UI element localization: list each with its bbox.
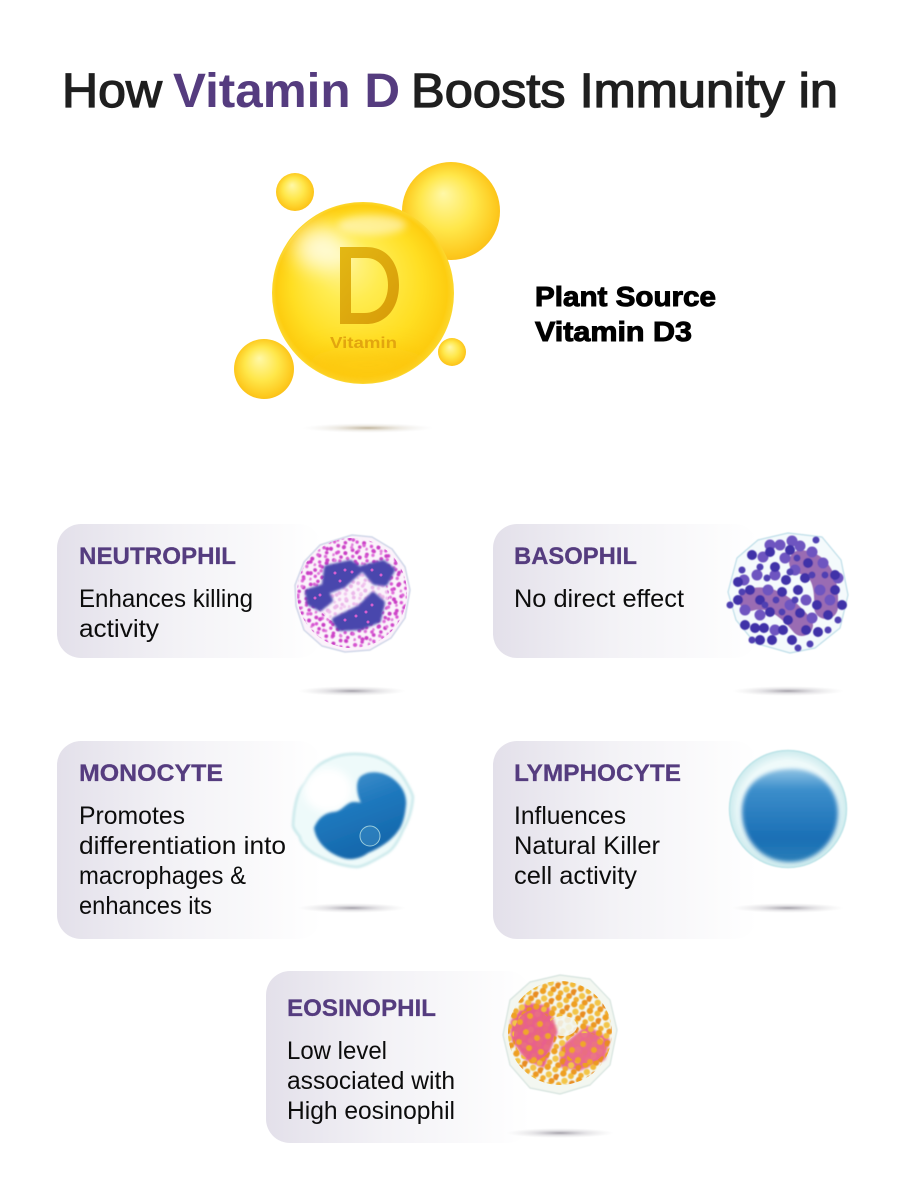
text: neutrophil effect [79, 585, 253, 643]
icon: neutrophil cell [290, 530, 415, 696]
heading: eosinophil: EOSINOPHIL [287, 995, 436, 1022]
icon: monocyte cell [293, 754, 413, 913]
icon: basophil cell [728, 533, 848, 696]
label: plant source vitamin D3: Plant Source [535, 281, 716, 312]
panel: basophil [493, 524, 848, 696]
text: monocyte effect: macrophages & [79, 862, 246, 890]
title: Vitamin D [173, 65, 400, 118]
panel: lymphocyte [493, 741, 846, 939]
text: eosinophil effect: High eosinophil [287, 1097, 455, 1125]
title [62, 65, 838, 118]
icon: vitamin D capsule bubbles: Vitamin [330, 335, 397, 352]
label: plant source vitamin D3: Vitamin D3 [535, 316, 692, 347]
text: monocyte effect: Promotes [79, 802, 185, 830]
text: lymphocyte effect: cell activity [514, 862, 637, 890]
text: lymphocyte effect [514, 802, 660, 890]
heading: monocyte: MONOCYTE [79, 760, 223, 787]
label: plant source vitamin D3 [535, 281, 716, 347]
title: Boosts Immunity in [411, 65, 838, 118]
panel: monocyte [57, 741, 413, 939]
heading: basophil: BASOPHIL [514, 543, 637, 570]
text: eosinophil effect [287, 1037, 455, 1125]
icon: vitamin D capsule bubbles [234, 162, 500, 433]
text: lymphocyte effect: Influences [514, 802, 626, 830]
title: How [62, 65, 162, 118]
text: monocyte effect: differentiation into [79, 832, 286, 860]
icon: lymphocyte cell [730, 750, 846, 913]
text: eosinophil effect: Low level [287, 1037, 387, 1065]
text: monocyte effect [79, 802, 286, 920]
panel: eosinophil [266, 970, 625, 1143]
heading: lymphocyte: LYMPHOCYTE [514, 760, 681, 787]
text: neutrophil effect: activity [79, 615, 160, 643]
text: basophil effect: No direct effect [514, 585, 684, 613]
icon: eosinophil cell [502, 974, 618, 1137]
text: eosinophil effect: associated with [287, 1067, 455, 1095]
panel: neutrophil [57, 524, 415, 696]
text: monocyte effect: enhances its [79, 892, 212, 920]
heading: neutrophil: NEUTROPHIL [79, 543, 236, 570]
text: lymphocyte effect: Natural Killer [514, 832, 660, 860]
text: neutrophil effect: Enhances killing [79, 585, 253, 613]
